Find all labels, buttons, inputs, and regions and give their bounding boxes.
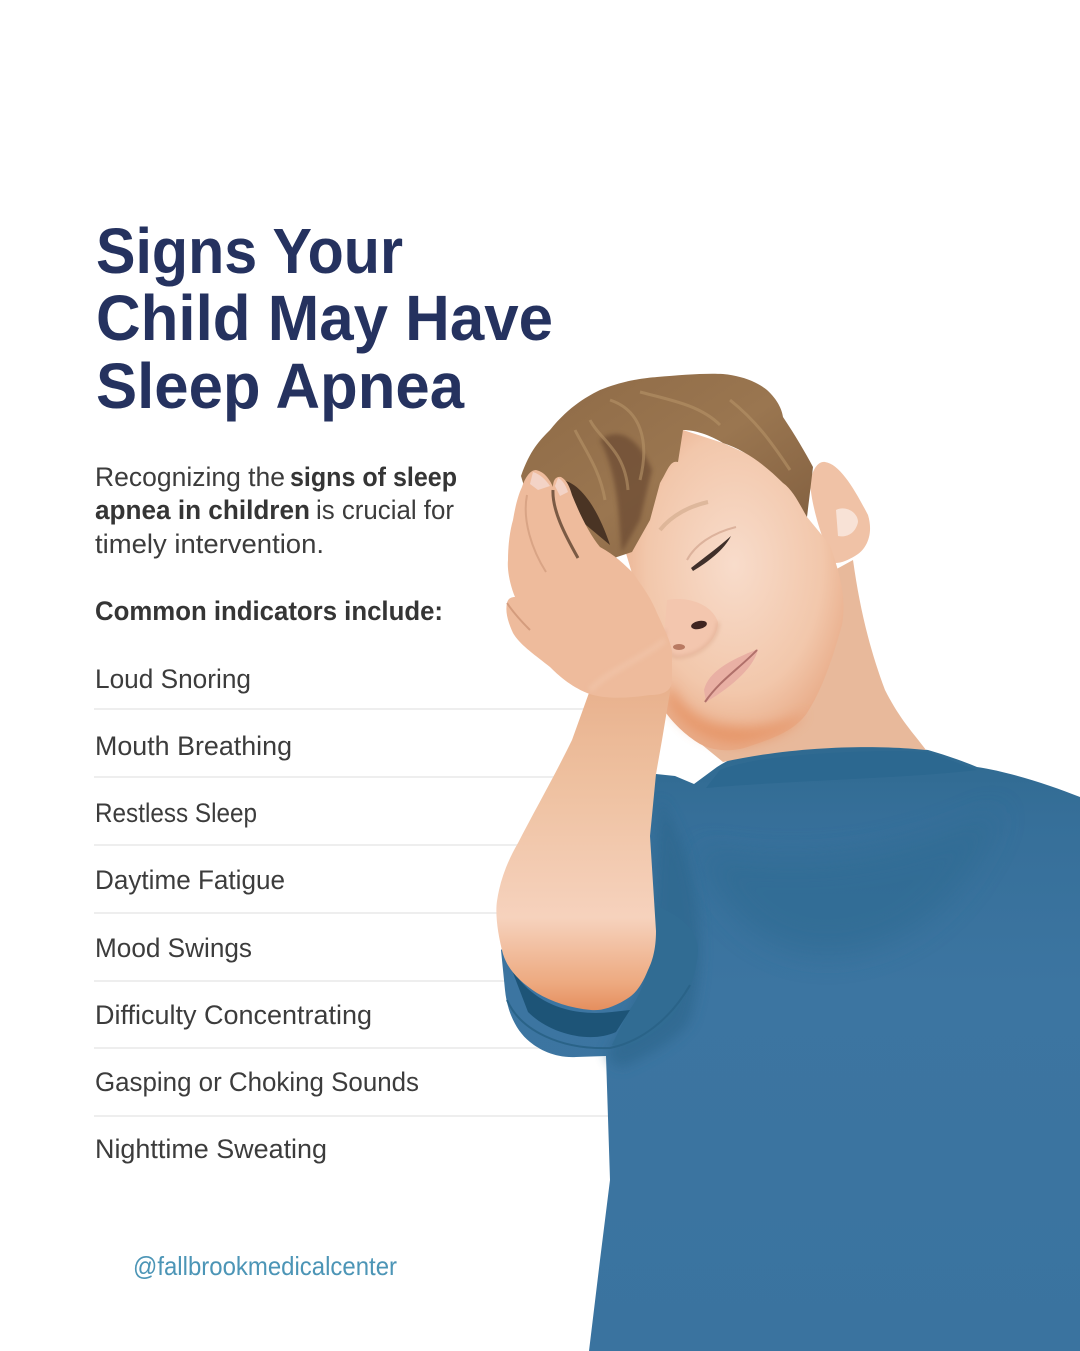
eyebrow [660, 502, 708, 530]
item: mouth breathing: Mouth Breathing [95, 731, 292, 761]
item: nighttime sweating: Nighttime Sweating [95, 1134, 327, 1164]
shirt [501, 745, 1080, 1351]
nose [664, 599, 718, 657]
closed eye [691, 536, 731, 571]
item: restless sleep: Restless Sleep [95, 798, 257, 828]
arm [496, 680, 672, 1010]
neck [690, 560, 926, 762]
indicators list [94, 664, 624, 1164]
item: gasping or choking sounds: Gasping or Choking Sounds [95, 1067, 419, 1097]
title [96, 215, 553, 422]
mouth [704, 649, 758, 702]
face [625, 430, 844, 750]
item: daytime fatigue: Daytime Fatigue [95, 865, 285, 895]
intro paragraph: signs of sleep [290, 462, 457, 492]
title: Sleep Apnea [96, 350, 464, 422]
rolled sleeve cuff [612, 905, 698, 1046]
jaw shading [666, 685, 805, 745]
title: Child May Have [96, 282, 553, 354]
intro paragraph: apnea in children [95, 495, 310, 525]
photo: tired boy resting head on hand [496, 374, 1080, 1351]
list heading: Common indicators include: [95, 596, 443, 626]
hand [506, 470, 672, 698]
intro paragraph: timely intervention. [95, 529, 324, 559]
item: mood swings: Mood Swings [95, 933, 252, 963]
intro paragraph [95, 462, 457, 559]
social handle: @fallbrookmedicalcenter [133, 1251, 397, 1281]
item: loud snoring: Loud Snoring [95, 664, 251, 694]
shirt soft folds [700, 810, 1000, 954]
intro paragraph: Recognizing the [95, 462, 285, 492]
ear [810, 462, 870, 563]
intro paragraph: is crucial for [316, 495, 454, 525]
title: Signs Your [96, 215, 403, 287]
hair [521, 374, 813, 570]
item: difficulty concentrating: Difficulty Concentrating [95, 1000, 372, 1030]
